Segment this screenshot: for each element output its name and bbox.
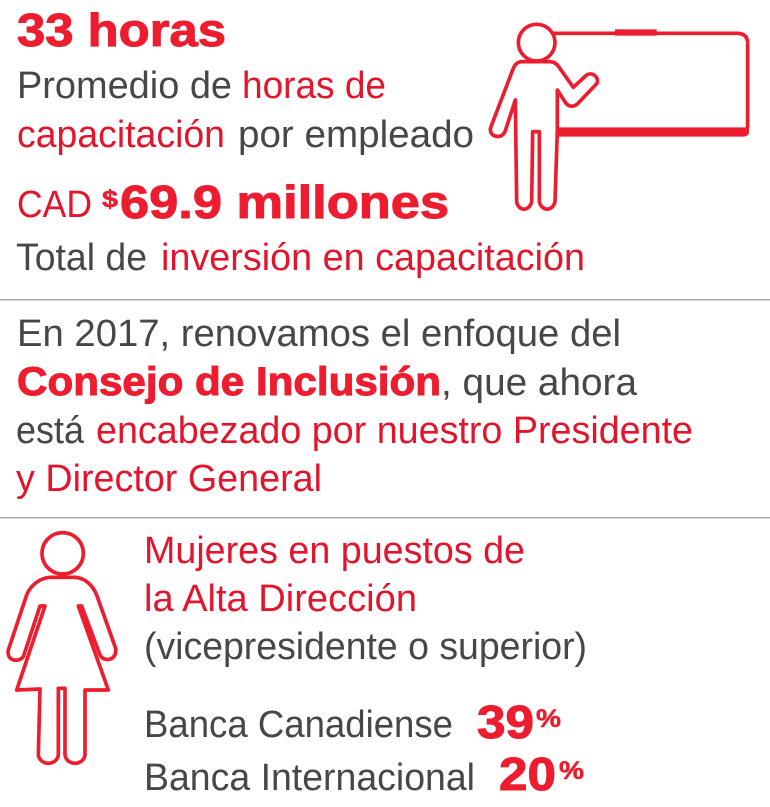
text block: Inclusion Council: En 2017, renovamos el enfoque del — [17, 313, 621, 355]
heading: 33 horas: 33 horas — [17, 4, 226, 56]
stat: Banca Internacional 20%: Banca Internacional — [144, 757, 475, 799]
stat: total training investment — [16, 176, 585, 279]
text: average training hours per employee — [17, 65, 474, 156]
amount: CAD 69.9 millones — [17, 176, 449, 228]
heading: women in senior management: (vicepresidente o superior) — [144, 626, 587, 668]
stat: Banca Internacional 20%: % — [559, 757, 584, 785]
stat: training hours — [17, 4, 474, 156]
text block: Inclusion Council: está — [16, 410, 85, 452]
text block: Inclusion Council: Consejo de Inclusión — [17, 360, 441, 404]
stat: Banca Canadiense 39%: 39 — [477, 696, 534, 748]
text: average training hours per employee: horas de — [242, 65, 386, 107]
text block: Inclusion Council — [16, 313, 693, 500]
amount: CAD 69.9 millones: $ — [102, 186, 119, 213]
person — [490, 24, 597, 209]
stat: Banca Canadiense 39%: Banca Canadiense — [144, 704, 453, 746]
stat: Banca Canadiense 39%: % — [536, 705, 561, 733]
text block: Inclusion Council: y Director General — [16, 458, 322, 500]
amount: CAD 69.9 millones: 69.9 millones — [120, 176, 449, 228]
stat: Banca Internacional 20% — [144, 748, 584, 800]
icon: woman — [8, 533, 116, 763]
heading: women in senior management: Mujeres en puestos de — [144, 530, 525, 572]
stat: Banca Canadiense 39% — [144, 696, 561, 748]
heading: women in senior management — [144, 530, 587, 668]
whiteboard — [553, 29, 749, 137]
stat: Banca Internacional 20%: 20 — [499, 748, 556, 800]
text: average training hours per employee: por empleado — [238, 114, 474, 156]
text block: Inclusion Council: , que ahora — [441, 362, 638, 404]
text: total investment in training: inversión en capacitación — [161, 237, 585, 279]
text: average training hours per employee: Promedio de — [17, 65, 232, 107]
icon: person at a whiteboard — [490, 24, 749, 209]
text block: Inclusion Council: encabezado por nuestro Presidente — [96, 410, 693, 452]
amount: CAD 69.9 millones: CAD — [17, 184, 92, 226]
heading: women in senior management: la Alta Dirección — [144, 578, 417, 620]
text: total investment in training: Total de — [16, 237, 147, 279]
text: average training hours per employee: capacitación — [17, 114, 225, 156]
